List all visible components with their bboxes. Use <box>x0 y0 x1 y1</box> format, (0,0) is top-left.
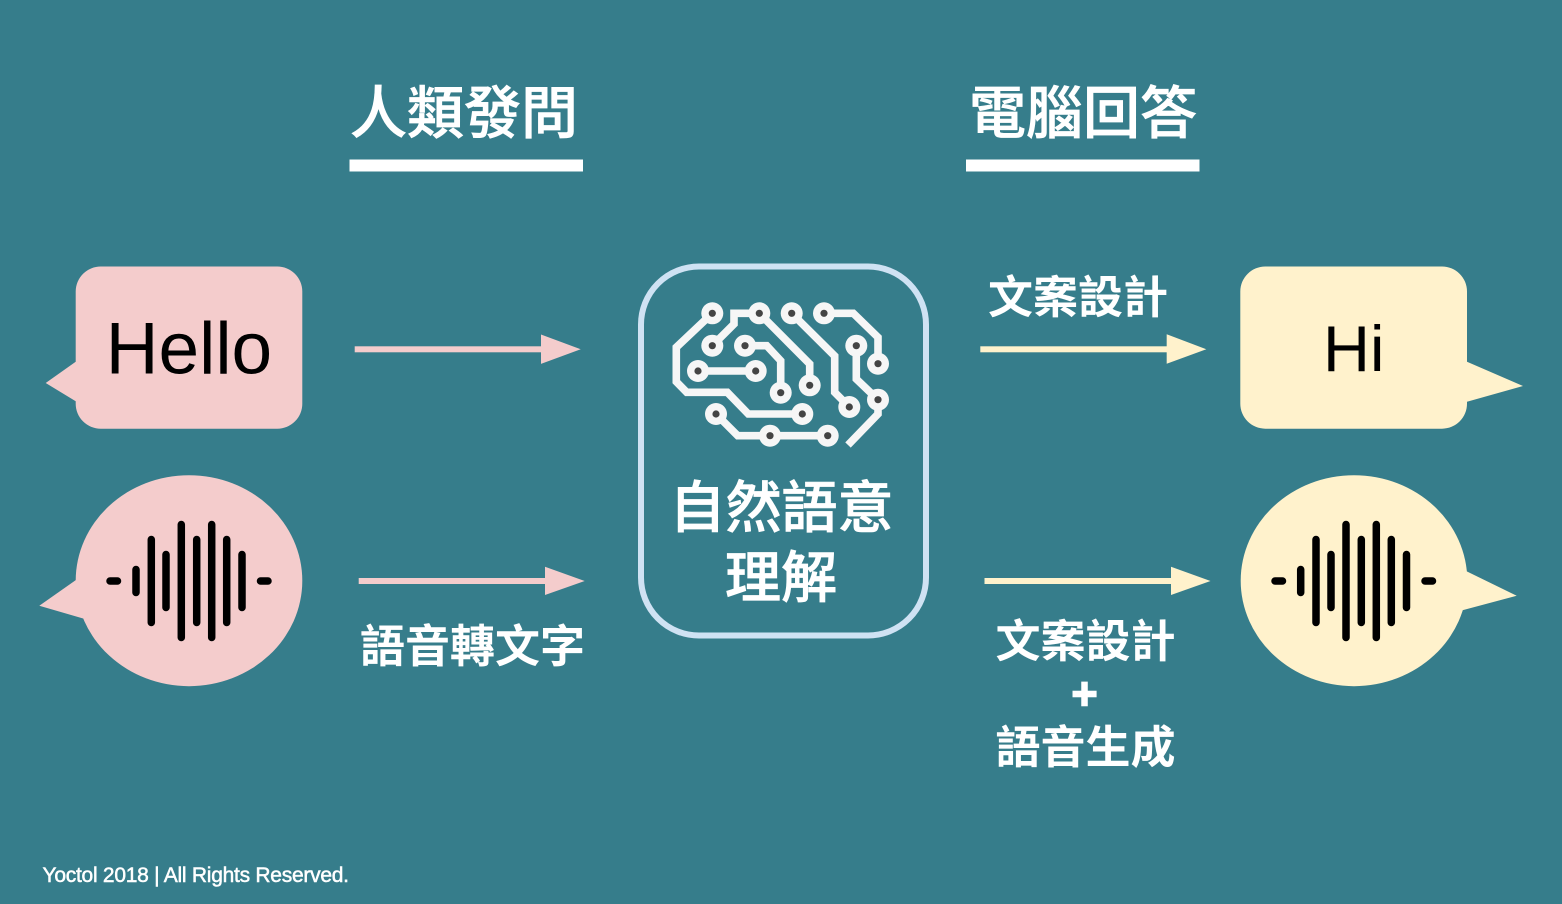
speech bubble: voice input <box>39 475 302 686</box>
heading: computer answers <box>966 82 1200 172</box>
panel title: understanding: 理解 <box>725 546 837 610</box>
heading: computer answers: 電腦回答 <box>969 82 1197 146</box>
label: copywriting plus speech synthesis: 語音生成 <box>996 722 1176 773</box>
label: copywriting plus speech synthesis: 文案設計 <box>996 616 1176 667</box>
speech bubble: Hi <box>1240 266 1523 429</box>
icon: circuit brain <box>676 302 889 447</box>
arrow: understanding to voice output <box>984 567 1210 595</box>
icon: sound wave output <box>1275 524 1432 638</box>
speech bubble: Hi: Hi <box>1323 312 1384 385</box>
label: copywriting plus speech synthesis: + <box>1071 668 1098 719</box>
speech bubble: voice output <box>1241 475 1517 686</box>
label: copywriting top: 文案設計 <box>988 272 1168 323</box>
heading: human asks <box>350 82 583 172</box>
panel title: natural language: 自然語意 <box>670 476 894 540</box>
panel: natural language understanding <box>641 266 926 636</box>
arrow: voice to understanding <box>359 567 585 595</box>
heading: human asks: 人類發問 <box>350 82 578 146</box>
arrow: Hello to understanding <box>355 334 581 364</box>
icon: sound wave input <box>110 524 268 638</box>
footer: copyright: Yoctol 2018 | All Rights Reserved. <box>42 864 349 887</box>
speech bubble: Hello <box>46 266 302 429</box>
speech bubble: Hello: Hello <box>106 308 272 390</box>
label: speech to text: 語音轉文字 <box>360 621 585 672</box>
label: copywriting plus speech synthesis <box>996 616 1176 773</box>
arrow: understanding to Hi <box>980 334 1206 364</box>
